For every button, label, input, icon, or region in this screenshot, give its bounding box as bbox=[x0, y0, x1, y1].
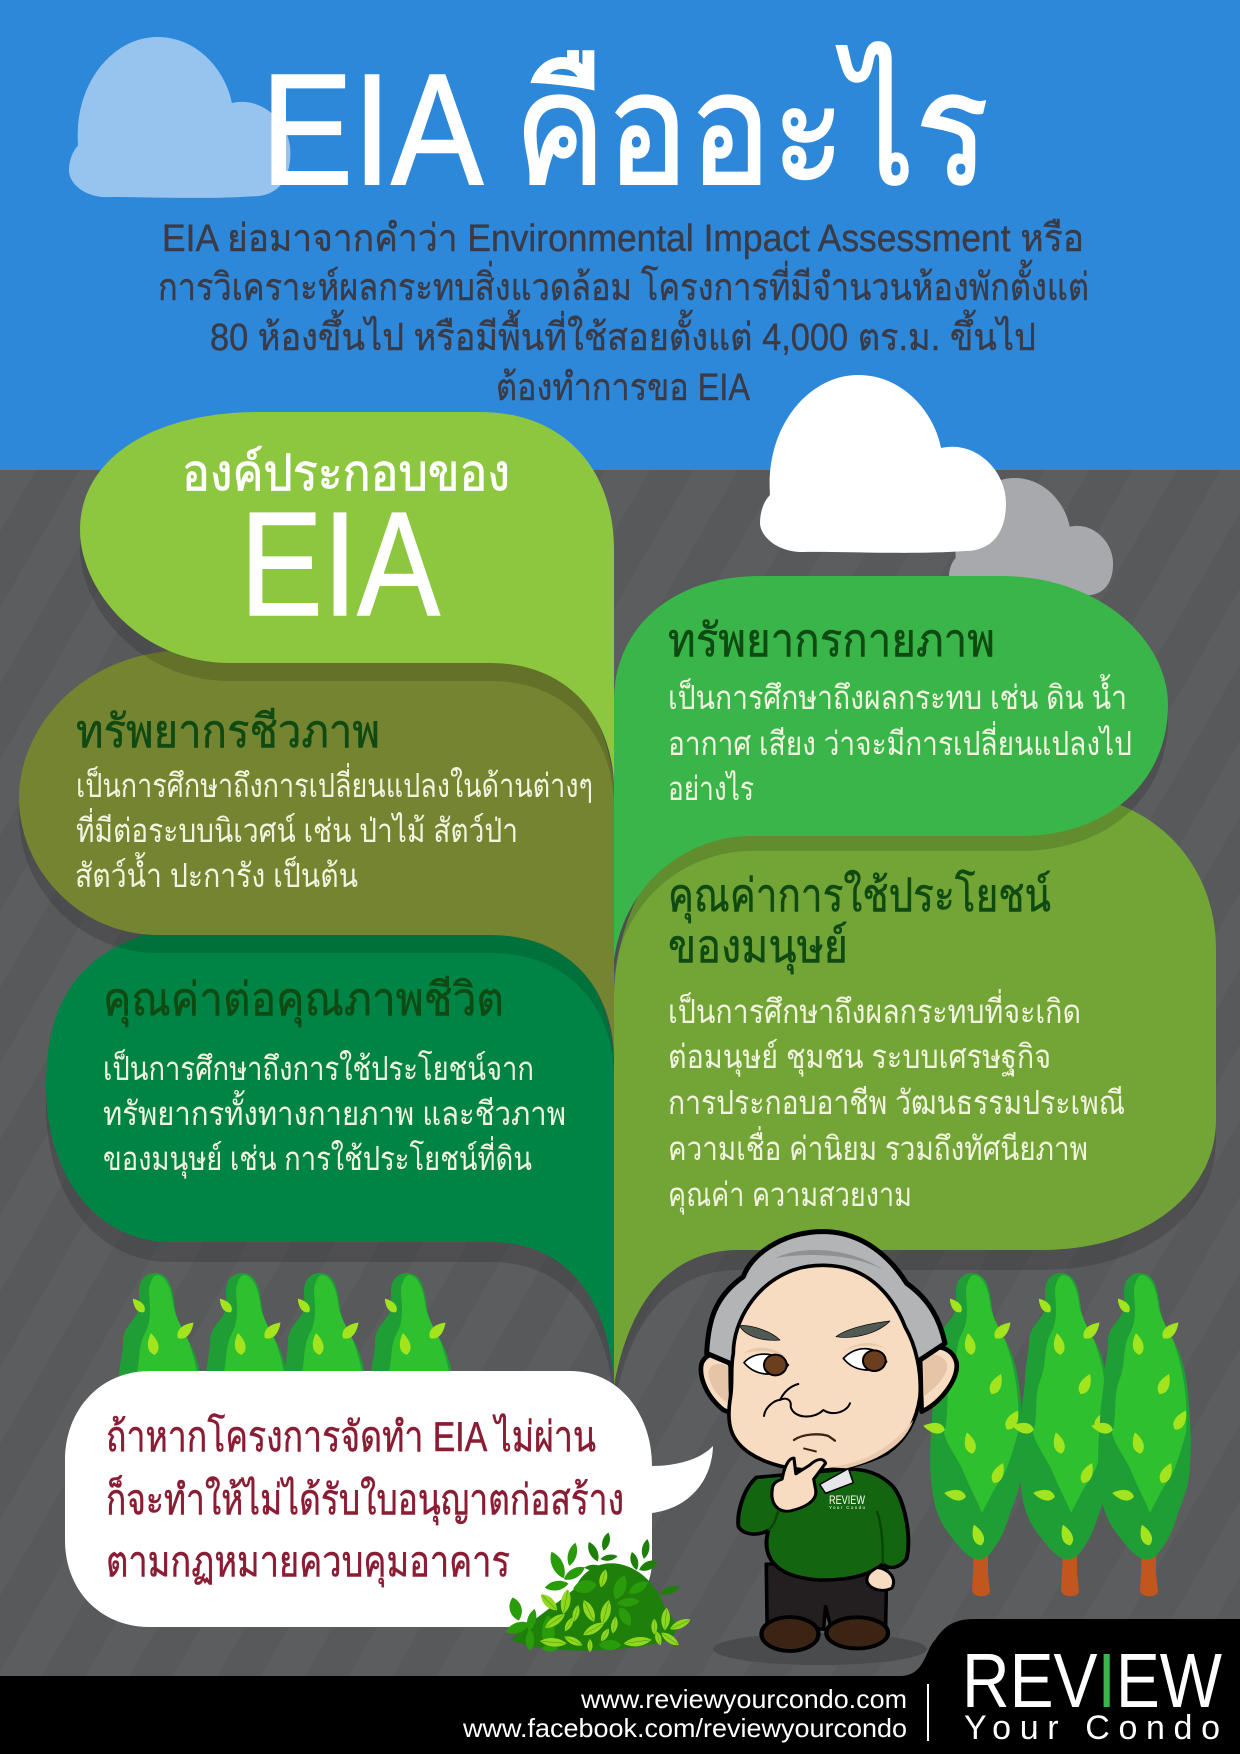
character hand bbox=[772, 1458, 826, 1511]
character: thinking old man bbox=[701, 1232, 957, 1665]
footer links: www.facebook.com/reviewyourcondo bbox=[462, 1713, 907, 1743]
icon: bush bbox=[504, 1532, 692, 1652]
intro text block: EIA ย่อมาจากคำว่า Environmental Impact Assessment หรือ bbox=[162, 218, 1084, 260]
intro text block: 80 ห้องขึ้นไป หรือมีพื้นที่ใช้สอยตั้งแต่ 4,000 ตร.ม. ขึ้นไป bbox=[210, 309, 1036, 359]
trees: right row bbox=[922, 1273, 1191, 1596]
panel: human use value bbox=[614, 790, 1216, 1405]
cloud: grey bbox=[949, 478, 1113, 597]
heading: components of EIA bbox=[182, 445, 510, 647]
text: human use value: คุณค่าการใช้ประโยชน์ bbox=[668, 869, 1051, 924]
panel: dark green quality of life bbox=[46, 925, 614, 1405]
shirt logo: Your Condo bbox=[829, 1505, 865, 1510]
text: quality of life bbox=[103, 973, 566, 1179]
text: physical resources: อย่างไร bbox=[668, 770, 754, 807]
intro text block: การวิเคราะห์ผลกระทบสิ่งแวดล้อม โครงการที่มีจำนวนห้องพักตั้งแต่ bbox=[158, 259, 1089, 309]
text: human use value: คุณค่า ความสวยงาม bbox=[668, 1176, 912, 1215]
heading: components of EIA: องค์ประกอบของ bbox=[182, 445, 510, 501]
text: quality of life: คุณค่าต่อคุณภาพชีวิต bbox=[103, 973, 504, 1028]
text: quality of life: เป็นการศึกษาถึงการใช้ประโยชน์จาก bbox=[103, 1049, 534, 1087]
shirt logo bbox=[829, 1493, 866, 1510]
callout: white speech bubble: ก็จะทำให้ไม่ได้รับใบอนุญาตก่อสร้าง bbox=[106, 1475, 624, 1526]
title: EIA คืออะไร bbox=[261, 42, 989, 218]
text: physical resources: เป็นการศึกษาถึงผลกระทบ เช่น ดิน น้ำ bbox=[668, 674, 1127, 716]
text: physical resources bbox=[668, 614, 1132, 807]
text: human use value: การประกอบอาชีพ วัฒนธรรมประเพณี bbox=[668, 1084, 1125, 1121]
intro text block: ต้องทำการขอ EIA bbox=[496, 367, 751, 409]
text: biological resources: ที่มีต่อระบบนิเวศน์ เช่น ป่าไม้ สัตว์ป่า bbox=[76, 808, 518, 849]
text: physical resources: อากาศ เสียง ว่าจะมีการเปลี่ยนแปลงไป bbox=[668, 721, 1132, 762]
character head bbox=[701, 1232, 957, 1470]
callout: white speech bubble bbox=[65, 1371, 713, 1627]
footer: black bar bbox=[0, 1619, 1240, 1754]
text: physical resources: ทรัพยากรกายภาพ bbox=[668, 614, 995, 666]
character body bbox=[738, 1469, 908, 1651]
cloud: white bbox=[760, 375, 1006, 553]
panel: olive biological resources bbox=[19, 650, 614, 1078]
footer links: www.reviewyourcondo.com bbox=[580, 1684, 907, 1714]
panel: physical resources bbox=[614, 576, 1168, 975]
text: biological resources: ทรัพยากรชีวภาพ bbox=[76, 705, 380, 757]
text: biological resources bbox=[75, 705, 593, 894]
text: biological resources: สัตว์น้ำ ปะการัง เป็นต้น bbox=[75, 852, 358, 894]
text: human use value bbox=[668, 869, 1125, 1215]
cloud: pale behind title bbox=[69, 37, 290, 198]
text: quality of life: ของมนุษย์ เช่น การใช้ประโยชน์ที่ดิน bbox=[103, 1136, 532, 1179]
trees: left row behind bubble bbox=[105, 1273, 458, 1559]
footer links bbox=[462, 1684, 907, 1743]
intro text block bbox=[158, 218, 1089, 409]
divider bbox=[927, 1684, 929, 1741]
text: human use value: ของมนุษย์ bbox=[668, 920, 848, 975]
text: human use value: ต่อมนุษย์ ชุมชน ระบบเศรษฐกิจ bbox=[668, 1038, 1051, 1077]
text: human use value: เป็นการศึกษาถึงผลกระทบที่จะเกิด bbox=[668, 989, 1081, 1030]
logo: Review Your Condo: Your Condo bbox=[964, 1709, 1220, 1747]
callout: white speech bubble: ถ้าหากโครงการจัดทำ EIA ไม่ผ่าน bbox=[106, 1412, 596, 1460]
heading: components of EIA: EIA bbox=[240, 482, 440, 647]
shirt logo: REVIEW bbox=[829, 1493, 866, 1507]
callout: white speech bubble: ตามกฏหมายควบคุมอาคาร bbox=[106, 1538, 510, 1588]
panel: light green header bubble bbox=[80, 412, 614, 808]
text: quality of life: ทรัพยากรทั้งทางกายภาพ และชีวภาพ bbox=[103, 1090, 566, 1132]
text: human use value: ความเชื่อ ค่านิยม รวมถึงทัศนียภาพ bbox=[668, 1126, 1088, 1167]
character shadow bbox=[713, 1633, 927, 1665]
logo: Review Your Condo: REVIEW bbox=[962, 1638, 1222, 1724]
text: biological resources: เป็นการศึกษาถึงการเปลี่ยนแปลงในด้านต่างๆ bbox=[76, 763, 593, 804]
